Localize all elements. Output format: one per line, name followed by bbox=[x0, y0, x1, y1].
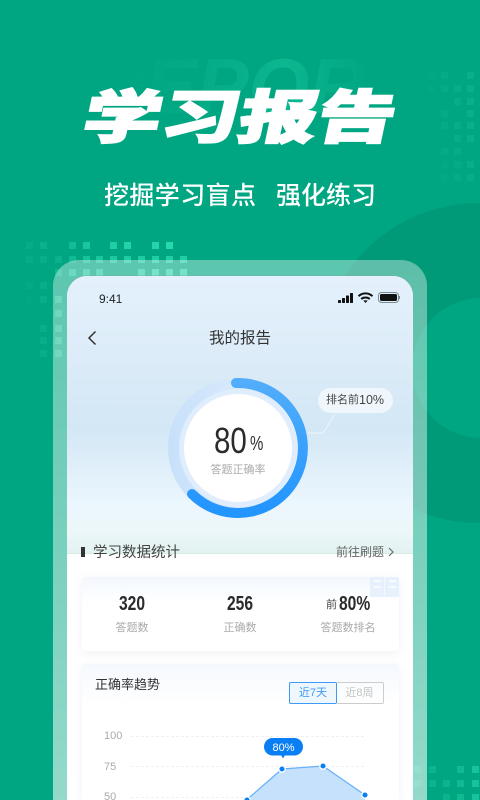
trend title: 正确率趋势 bbox=[95, 677, 160, 692]
ring value: 80 bbox=[214, 420, 247, 461]
phone frame bbox=[53, 260, 427, 800]
book icon bbox=[370, 577, 399, 597]
stat: answered bbox=[116, 593, 148, 634]
wifi bbox=[358, 293, 372, 303]
line chart bbox=[104, 730, 368, 800]
data points bbox=[244, 763, 368, 800]
ring value: % bbox=[250, 433, 263, 455]
trend card bbox=[82, 664, 399, 800]
tab: 8 weeks bbox=[336, 682, 384, 704]
decorative ring bbox=[319, 203, 480, 523]
ranking pill: 10% bbox=[359, 393, 384, 407]
y axis labels: 100 bbox=[104, 730, 122, 742]
phone screen bbox=[67, 276, 413, 800]
ring label: 答题正确率 bbox=[210, 464, 266, 476]
stat: rank: 前 bbox=[326, 599, 337, 611]
progress ring bbox=[168, 378, 308, 518]
subtitle: 挖掘学习盲点 bbox=[104, 182, 256, 210]
back chevron bbox=[88, 331, 96, 345]
tab: 7 days bbox=[289, 682, 337, 704]
ring value bbox=[214, 420, 263, 461]
stat: rank: 答题数排名 bbox=[320, 622, 376, 634]
title: 学习报告 bbox=[77, 85, 403, 151]
stat: correct: 正确数 bbox=[224, 622, 256, 634]
value badge bbox=[264, 738, 303, 758]
value badge: 80% bbox=[272, 742, 295, 754]
battery bbox=[378, 292, 400, 302]
ranking pill bbox=[318, 388, 393, 413]
tab: 7 days: 近7天 bbox=[299, 687, 327, 699]
section heading: 学习数据统计 bbox=[93, 545, 180, 561]
stats card bbox=[82, 577, 399, 651]
y axis labels bbox=[104, 730, 122, 800]
stat: rank bbox=[320, 593, 376, 634]
dots left bbox=[26, 242, 187, 357]
y axis labels: 75 bbox=[104, 761, 116, 773]
watermark word: REPORT bbox=[88, 42, 418, 130]
ranking pill: 排名前 bbox=[326, 394, 359, 406]
subtitle: 强化练习 bbox=[276, 182, 376, 210]
dots top right bbox=[428, 72, 474, 181]
stat: answered: 答题数 bbox=[116, 622, 148, 634]
stat: correct bbox=[224, 593, 256, 634]
page title: 我的报告 bbox=[209, 330, 271, 347]
stat: correct: 256 bbox=[227, 593, 253, 615]
tab: 8 weeks: 近8周 bbox=[345, 687, 374, 699]
go practice link: 前往刷题 bbox=[336, 545, 384, 559]
status bar time: 9:41 bbox=[99, 292, 122, 306]
area and line bbox=[243, 766, 365, 800]
stat: answered: 320 bbox=[119, 593, 145, 615]
stat: rank: 80% bbox=[339, 593, 370, 615]
dots bottom right bbox=[414, 766, 479, 800]
header background bbox=[67, 276, 413, 554]
signal bbox=[338, 293, 353, 303]
subtitle bbox=[104, 182, 376, 210]
status icons bbox=[338, 292, 400, 303]
ranking connector bbox=[308, 414, 336, 434]
